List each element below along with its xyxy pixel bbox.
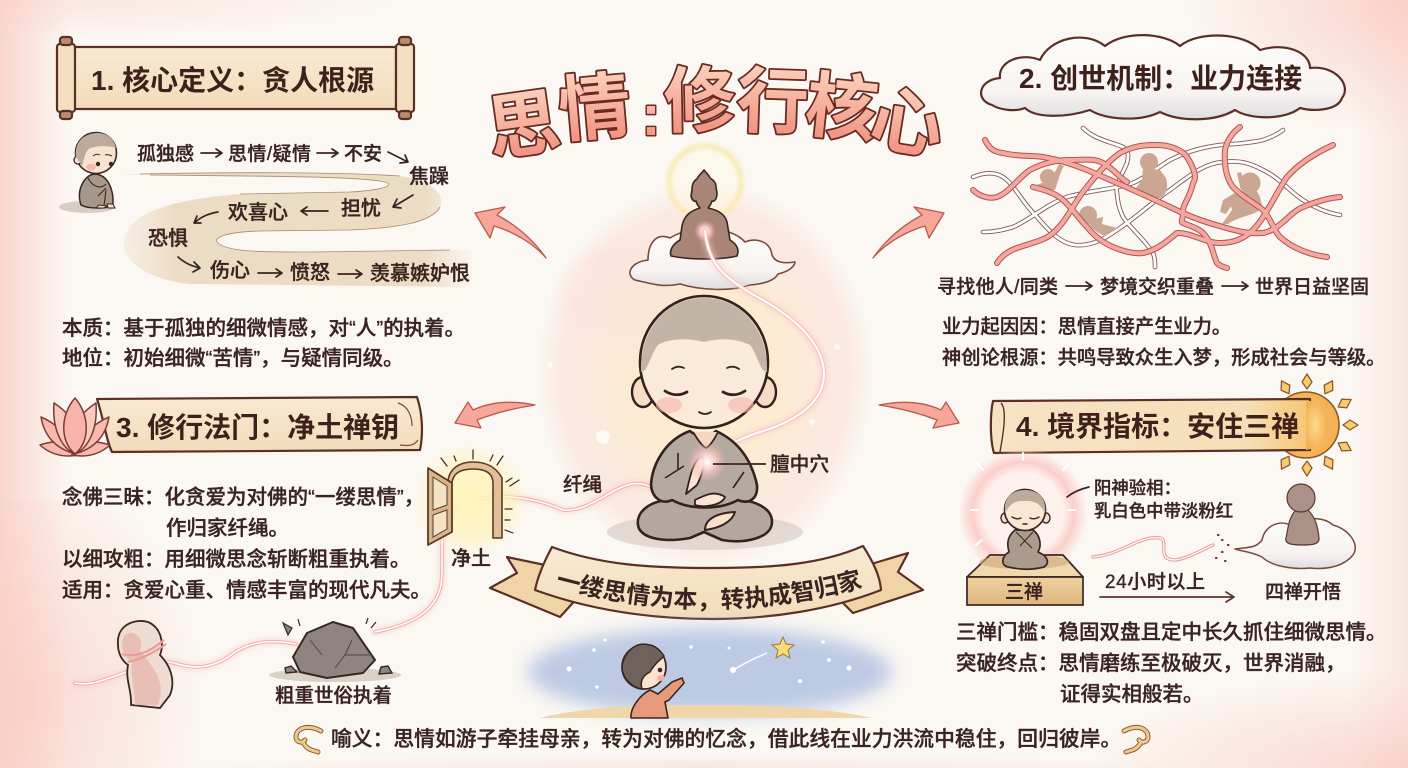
practice text: 作归家纤绳。	[166, 517, 289, 540]
icon: right swirl	[1124, 727, 1148, 752]
tangled karma threads	[973, 127, 1340, 268]
scroll heading 4	[991, 399, 1329, 453]
fourth dhyana figure on cloud	[1235, 484, 1355, 568]
panel: attainment marker	[956, 374, 1386, 706]
arrow: to section 4	[879, 402, 959, 428]
title: 思情:修行核心: 思	[482, 82, 565, 171]
attainment text: 三禅门槛：稳固双盘且定中长久抓住细微思情。	[956, 621, 1386, 644]
panel: creation mechanism	[937, 35, 1385, 369]
rope: thread from buddha to heart	[705, 231, 824, 462]
process caption: 世界日益坚固	[1255, 276, 1369, 298]
definition text: 本质：基于孤独的细微情感，对“人”的执着。	[62, 317, 465, 340]
third dhyana monk on platform	[958, 448, 1088, 605]
panel: core definition	[57, 37, 476, 370]
label: 膻中穴: 膻中穴	[770, 454, 829, 476]
central meditating monk	[547, 296, 840, 550]
icon: left swirl	[296, 727, 321, 752]
winding emotion road	[124, 173, 476, 287]
golden star	[772, 637, 794, 658]
fetal figures	[1033, 153, 1262, 236]
scroll heading 3	[97, 397, 422, 452]
practice text: 念佛三昧：化贪爱为对佛的“一缕思情”，	[62, 485, 424, 509]
icon: lotus	[40, 398, 110, 456]
emotion chain: 思情/疑情	[228, 143, 311, 165]
karma text: 神创论根源：共鸣导致众生入梦，形成社会与等级。	[942, 347, 1385, 369]
practice text	[62, 485, 431, 602]
scroll heading 4: 4. 境界指标：安住三禅	[1016, 411, 1299, 442]
emotion chain: 担忧	[341, 197, 381, 220]
attainment text: 证得实相般若。	[1060, 683, 1204, 706]
practice text: 适用：贪爱心重、情感丰富的现代凡夫。	[62, 579, 431, 602]
arrow: to section 2	[873, 207, 944, 258]
icon: pure land door	[412, 442, 528, 558]
label: 纤绳: 纤绳	[563, 474, 602, 496]
light sparkles	[547, 344, 840, 444]
process caption: 寻找他人/同类	[937, 276, 1058, 298]
emotion chain	[137, 143, 470, 285]
shadow	[607, 514, 803, 550]
title: 思情:修行核心: 修	[663, 61, 736, 143]
title: 思情:修行核心: 核	[802, 66, 882, 153]
cloud heading 2	[981, 35, 1345, 119]
stars	[566, 638, 852, 689]
label: fourth dhyana awakening: 四禅开悟	[1265, 581, 1341, 603]
emotion chain: 愤怒	[290, 261, 330, 284]
emotion chain: 恐惧	[148, 227, 188, 250]
child	[622, 644, 684, 718]
thread breaking towards fourth dhyana	[1093, 535, 1228, 561]
title: 思情:修行核心: :	[641, 84, 661, 148]
emotion chain: 伤心	[210, 259, 250, 282]
monk legs	[638, 500, 772, 541]
icon: buddha on cloud with halo	[630, 140, 795, 289]
emotion chain: 欢喜心	[228, 201, 288, 224]
callout: yang spirit sign	[1067, 478, 1233, 521]
karma text	[942, 316, 1385, 369]
footer: metaphor line: 喻义：思情如游子牵挂母亲，转为对佛的忆念，借此线在业力洪流中稳住，回归彼岸。	[331, 727, 1121, 751]
label and arrow: over 24 hours	[1100, 571, 1234, 602]
callout: yang spirit sign: 乳白色中带淡粉红	[1094, 501, 1233, 521]
practice text: 以细攻粗：用细微思念斩断粗重执着。	[62, 547, 410, 571]
process caption: 梦境交织重叠	[1100, 276, 1214, 298]
title: 思情:修行核心: 心	[865, 79, 949, 169]
karma text: 业力起因因：思情直接产生业力。	[942, 316, 1231, 338]
scene: child pointing at star	[528, 628, 892, 718]
banner: central motto: 一缕思情为本，转执成智归家	[558, 570, 862, 612]
definition text: 地位：初始细微“苦情”，与疑情同级。	[62, 347, 404, 370]
icon: sun	[1273, 374, 1358, 476]
label and arrow: over 24 hours: 24小时以上	[1105, 571, 1205, 593]
label: 膻中穴	[713, 454, 829, 476]
sand	[540, 705, 872, 718]
scroll heading 3: 3. 修行法门：净土禅钥	[116, 412, 399, 443]
title: 思情:修行核心	[482, 61, 949, 171]
title: 思情:修行核心: 行	[735, 62, 810, 144]
monk robe	[651, 431, 757, 508]
monk head	[632, 296, 776, 428]
icon: rock of coarse attachment	[269, 618, 401, 682]
rope: pure land thread from head to heart	[75, 462, 708, 684]
arrow: to section 3	[455, 402, 535, 428]
arrow: to section 1	[475, 207, 546, 258]
process caption	[937, 276, 1369, 298]
monk hands	[686, 456, 725, 506]
callout: yang spirit sign: 阳神验相：	[1094, 478, 1181, 498]
emotion chain: 羡慕嫉妒恨	[370, 262, 470, 285]
night sky wash	[528, 628, 892, 716]
definition text	[62, 317, 465, 370]
attainment text: 突破终点：思情磨练至极破灭，世界消融，	[956, 652, 1346, 675]
heart point glow	[687, 442, 727, 482]
title: 思情:修行核心: 情	[556, 66, 634, 152]
cloud heading 2: 2. 创世机制：业力连接	[1019, 63, 1302, 94]
icon: lonely small monk	[59, 132, 116, 213]
third dhyana monk on platform: 三禅	[1005, 581, 1043, 603]
attainment text	[956, 621, 1386, 706]
label: coarse attachment: 粗重世俗执着	[275, 685, 392, 707]
emotion chain: 孤独感	[137, 143, 194, 165]
emotion chain: 焦躁	[409, 165, 449, 188]
label: pure land: 净土	[451, 547, 491, 570]
icon: head tied by rope	[118, 621, 172, 708]
white threads	[973, 128, 1340, 267]
central glow	[535, 180, 875, 570]
panel: practice method	[40, 397, 528, 708]
red threads	[973, 127, 1340, 268]
emotion chain: 不安	[344, 143, 382, 165]
banner: central motto	[488, 544, 924, 620]
scroll heading 1: 1. 核心定义：贪人根源	[91, 65, 374, 96]
scroll heading 1	[57, 37, 414, 119]
